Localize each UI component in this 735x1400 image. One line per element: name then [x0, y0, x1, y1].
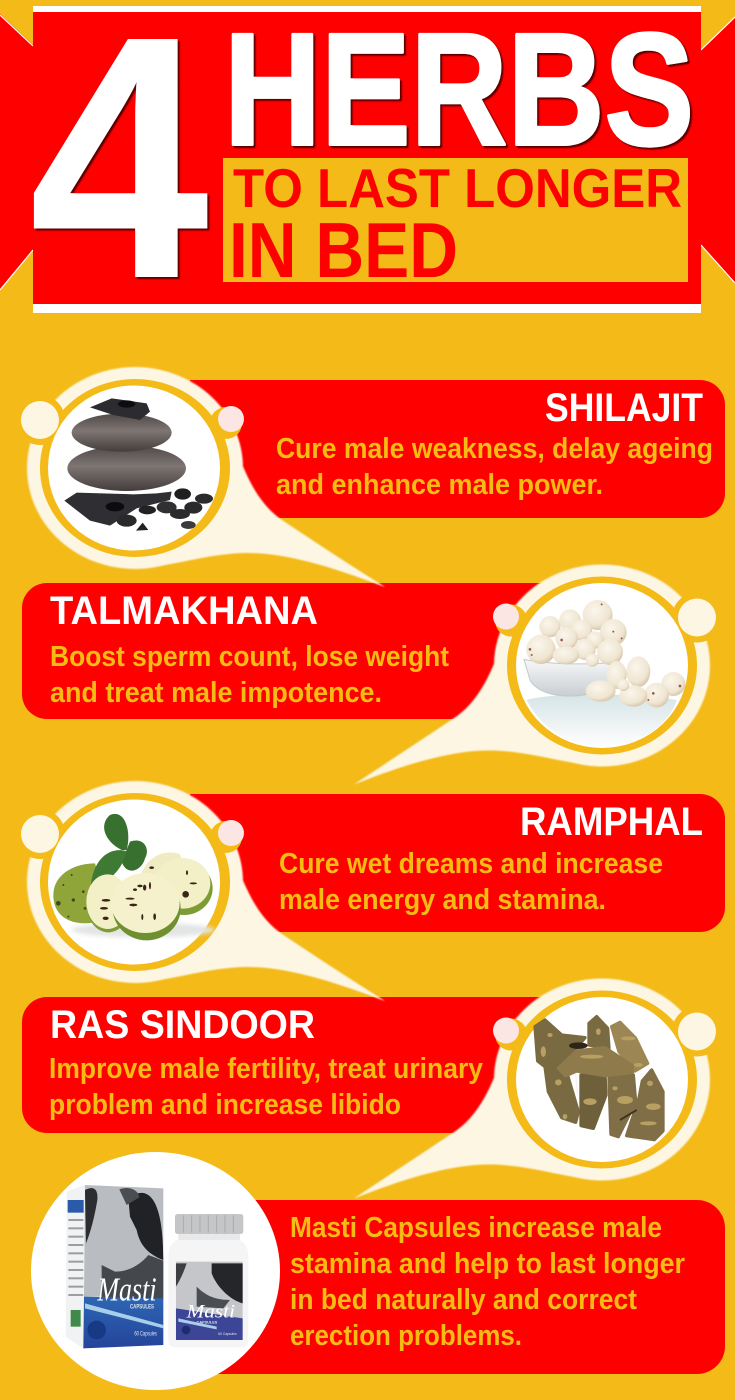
- icon: ramphal fruit: [53, 814, 215, 940]
- text: masti capsules benefits: erection problems.: [290, 1320, 522, 1352]
- text: shilajit benefits: Cure male weakness, delay ageing: [276, 433, 713, 465]
- subtitle line 2: IN BED: [229, 206, 458, 294]
- text: masti capsules benefits: [290, 1212, 685, 1352]
- subtitle line 1: TO LAST LONGER: [233, 157, 682, 219]
- text: shilajit benefits: [276, 433, 713, 501]
- heading: ramphal: RAMPHAL: [520, 800, 703, 844]
- panel: shilajit: [190, 380, 725, 518]
- panel: talmakhana: [22, 583, 545, 719]
- icon: masti box: CAPSULES: [130, 1303, 154, 1310]
- icon: masti bottle: Masti: [186, 1302, 235, 1323]
- bubble: shilajit: [15, 367, 385, 587]
- text: ras sindoor benefits: problem and increase libido: [49, 1089, 401, 1121]
- text: ramphal benefits: [279, 848, 663, 916]
- panel: ramphal: [190, 794, 725, 932]
- bubble: ramphal: [15, 781, 385, 1001]
- icon: masti box: 60 Capsules: [134, 1332, 157, 1338]
- text: talmakhana benefits: and treat male impotence.: [50, 677, 382, 709]
- icon: shilajit stones: [64, 398, 213, 531]
- text: talmakhana benefits: Boost sperm count, lose weight: [50, 641, 449, 673]
- title: [29, 0, 694, 351]
- panel: masti capsules: [200, 1200, 725, 1374]
- bubble: talmakhana: [354, 564, 722, 784]
- subtitle box: [223, 158, 688, 282]
- icon: masti box: Masti: [97, 1272, 157, 1309]
- text: masti capsules benefits: Masti Capsules increase male: [290, 1212, 662, 1244]
- icon: masti bottle: 60 Capsules: [218, 1332, 237, 1336]
- text: masti capsules benefits: stamina and help to last longer: [290, 1248, 685, 1280]
- product circle: masti capsules: [31, 1152, 280, 1390]
- text: ramphal benefits: male energy and stamina.: [279, 884, 606, 916]
- heading: ras sindoor: RAS SINDOOR: [50, 1003, 315, 1047]
- icon: masti box: [66, 1185, 163, 1348]
- heading: shilajit: SHILAJIT: [545, 386, 703, 430]
- text: ramphal benefits: Cure wet dreams and increase: [279, 848, 663, 880]
- bubble: ras sindoor: [354, 978, 722, 1198]
- text: ras sindoor benefits: [49, 1053, 483, 1121]
- heading: talmakhana: TALMAKHANA: [50, 589, 318, 633]
- text: shilajit benefits: and enhance male power.: [276, 469, 603, 501]
- text: ras sindoor benefits: Improve male fertility, treat urinary: [49, 1053, 483, 1085]
- text: talmakhana benefits: [50, 641, 449, 709]
- icon: talmakhana bowl: [524, 600, 685, 748]
- icon: masti bottle: CAPSULES: [197, 1319, 218, 1324]
- header banner: [0, 0, 735, 343]
- text: masti capsules benefits: in bed naturally and correct: [290, 1284, 637, 1316]
- icon: masti bottle: [168, 1214, 248, 1347]
- panel: ras sindoor: [22, 997, 545, 1133]
- icon: ras sindoor pieces: [535, 1017, 663, 1140]
